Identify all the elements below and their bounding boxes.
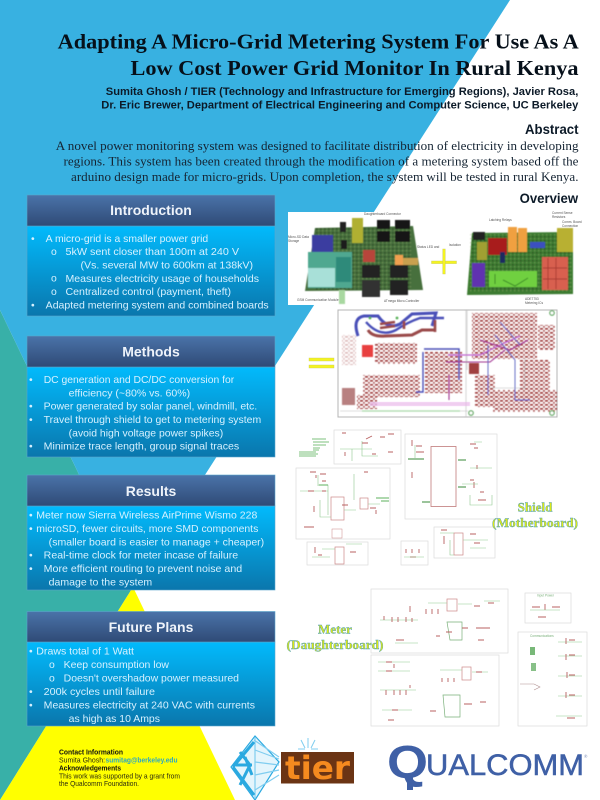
- abstract text: arduino design made for micro-grids. Upon completion, the system will be tested in rural Kenya.: [71, 170, 578, 184]
- contact information: Sumita Ghosh:: [59, 756, 105, 764]
- label: meter: Meter: [318, 622, 352, 636]
- shield callout labels: Daughterboard Connector: [364, 212, 402, 216]
- methods bullets: efficiency (~80% vs. 60%): [69, 388, 190, 400]
- methods bullets: •: [29, 415, 33, 426]
- shield schematics: [296, 430, 497, 565]
- methods bullets: •: [29, 375, 33, 386]
- pcb layout: [338, 310, 557, 417]
- results bullets: microSD, fewer circuits, more SMD components: [36, 524, 258, 535]
- methods body background: [27, 367, 275, 457]
- methods bullets: DC generation and DC/DC conversion for: [44, 375, 235, 386]
- results bullets: Meter now Sierra Wireless AirPrime Wismo 228: [36, 510, 258, 522]
- tier sunburst: [298, 738, 318, 749]
- shield callout labels: Status LED and: [417, 245, 440, 249]
- introduction bullets: [31, 234, 269, 312]
- authors: Sumita Ghosh / TIER (Technology and Infrastructure for Emerging Regions), Javier Rosa,: [106, 86, 578, 98]
- meter callout labels: Resistors: [552, 215, 566, 219]
- future plans header bar: [27, 612, 275, 642]
- meter callout labels: [449, 211, 582, 305]
- contact information: sumitag@berkeley.edu: [106, 756, 178, 764]
- future plans bullets: Keep consumption low: [64, 660, 169, 671]
- results bullets: Real-time clock for meter incase of failure: [44, 551, 238, 562]
- introduction bullets: Measures electricity usage of households: [66, 274, 259, 285]
- schematic sheet: input circuit: [296, 468, 390, 539]
- future plans bullets: o: [49, 660, 55, 671]
- schematic sheet: power: [334, 430, 401, 464]
- tier wordmark: tier: [285, 749, 350, 787]
- shield callout labels: GSM Communication Module: [297, 298, 339, 302]
- schematic sheet: interface: [307, 542, 368, 565]
- methods bullets: Travel through shield to get to metering system: [44, 415, 261, 426]
- label: shield: (Motherboard): [492, 515, 578, 530]
- schematic sheet: metering channel a: [371, 589, 508, 653]
- introduction heading: Introduction: [110, 202, 192, 218]
- label: shield: [492, 500, 578, 530]
- introduction bullets: o: [51, 274, 57, 284]
- methods bullets: (avoid high voltage power spikes): [69, 428, 223, 440]
- shield callout labels: Storage: [288, 239, 299, 243]
- logo: qualcomm: [387, 736, 588, 790]
- methods header bar: [27, 336, 275, 367]
- panel: methods: [27, 336, 275, 457]
- background: blue panel: [0, 0, 510, 587]
- future plans bullets: Doesn't overshadow power measured: [64, 674, 239, 684]
- contact information: Contact Information: [59, 748, 123, 756]
- introduction bullets: •: [31, 234, 35, 245]
- future plans bullets: •: [29, 687, 33, 698]
- background: yellow panel: [0, 587, 235, 800]
- results heading: Results: [126, 483, 176, 499]
- introduction body background: [27, 226, 275, 316]
- authors: [101, 86, 578, 112]
- future plans body background: [27, 642, 275, 726]
- methods heading: Methods: [122, 344, 180, 360]
- results bullets: •: [29, 524, 33, 535]
- schematic sheet: input power: [525, 593, 571, 623]
- methods bullets: Power generated by solar panel, windmill, etc.: [44, 402, 257, 413]
- meter callout labels: Isolation: [449, 243, 461, 247]
- title: Low Cost Power Grid Monitor In Rural Kenya: [130, 56, 579, 80]
- future plans bullets: •: [29, 646, 33, 658]
- results body background: [27, 506, 275, 590]
- results bullets: •: [29, 564, 33, 575]
- future plans bullets: o: [49, 674, 55, 684]
- meter callout labels: Comm. Board: [562, 220, 582, 224]
- panel: introduction: [27, 195, 275, 316]
- introduction bullets: o: [51, 287, 57, 298]
- meter schematics: [371, 589, 587, 726]
- introduction bullets: 5kW sent closer than 100m at 240 V: [66, 247, 239, 258]
- schematic sheet: regulator: [434, 527, 495, 558]
- tier diamond: [231, 736, 279, 800]
- future plans bullets: Draws total of 1 Watt: [36, 646, 134, 658]
- meter callout labels: Metering ICs: [525, 301, 543, 305]
- authors: Dr. Eric Brewer, Department of Electrical Engineering and Computer Science, UC Berkeley: [101, 100, 578, 112]
- abstract text: [56, 139, 579, 184]
- schematic sheet: input power: Input Power: [537, 594, 555, 598]
- introduction bullets: •: [31, 300, 35, 312]
- photo: meter daughterboard: [449, 211, 582, 305]
- title: [58, 30, 579, 80]
- results bullets: [29, 510, 264, 588]
- abstract heading: Abstract: [525, 122, 579, 137]
- photo: shield motherboard: [288, 212, 448, 305]
- contact information: Acknowledgements: [59, 764, 121, 772]
- meter callout labels: Connection: [562, 224, 578, 228]
- contact information: [59, 748, 180, 788]
- introduction header bar: [27, 195, 275, 226]
- shield callout labels: Micro-SD Data: [288, 235, 309, 239]
- abstract text: regions. This system has been created through the modification of a metering system based off the: [64, 154, 579, 168]
- schematic sheet: metering channel b: [371, 655, 499, 726]
- future plans heading: Future Plans: [109, 619, 194, 635]
- contact information: the Qualcomm Foundation.: [59, 779, 139, 788]
- icon: plus sign: [432, 249, 456, 274]
- meter callout labels: Current Sense: [552, 211, 573, 215]
- panel: results: [27, 475, 275, 590]
- label: meter: [286, 622, 384, 652]
- background: teal panel: [0, 310, 133, 800]
- schematic sheet: communications: [518, 632, 587, 726]
- icon: equals sign: [309, 358, 334, 368]
- results bullets: •: [29, 551, 33, 562]
- results header bar: [27, 475, 275, 506]
- logo: qualcomm: Q: [387, 736, 428, 788]
- future plans bullets: as high as 10 Amps: [69, 714, 160, 725]
- results bullets: More efficient routing to prevent noise and: [44, 564, 242, 575]
- panel: future plans: [27, 612, 275, 726]
- meter callout labels: ADE7753: [525, 297, 539, 301]
- contact information: This work was supported by a grant from: [59, 772, 180, 780]
- methods bullets: Minimize trace length, group signal traces: [44, 442, 239, 453]
- schematic legend lines: [299, 439, 329, 456]
- results bullets: damage to the system: [49, 578, 152, 588]
- overview heading: Overview: [520, 191, 579, 206]
- future plans bullets: [29, 646, 255, 725]
- introduction bullets: A micro-grid is a smaller power grid: [46, 234, 208, 245]
- meter callout labels: Latching Relays: [489, 218, 512, 222]
- schematic sheet: microcontroller: [405, 434, 497, 519]
- label: shield: Shield: [518, 500, 553, 514]
- methods bullets: •: [29, 402, 33, 413]
- logo: tier: [231, 736, 354, 800]
- introduction bullets: Adapted metering system and combined boards: [46, 300, 269, 312]
- methods bullets: •: [29, 442, 33, 453]
- results bullets: (smaller board is easier to manage + cheaper): [49, 538, 264, 548]
- schematic sheet: communications: Communications: [530, 634, 554, 638]
- future plans bullets: 200k cycles until failure: [44, 687, 155, 698]
- results bullets: •: [29, 510, 33, 522]
- methods bullets: [29, 375, 261, 453]
- title: Adapting A Micro-Grid Metering System For Use As A: [58, 30, 579, 54]
- logo: qualcomm: UALCOMM: [426, 749, 584, 782]
- label: meter: (Daughterboard): [286, 637, 384, 652]
- abstract text: A novel power monitoring system was designed to facilitate distribution of electricity in developing: [56, 139, 579, 153]
- future plans bullets: •: [29, 700, 33, 712]
- shield callout labels: ATmega Micro-Controller: [384, 299, 420, 303]
- future plans bullets: Measures electricity at 240 VAC with currents: [44, 700, 255, 712]
- introduction bullets: (Vs. several MW to 600km at 138kV): [80, 260, 253, 272]
- introduction bullets: Centralized control (payment, theft): [66, 287, 231, 298]
- schematic sheet: connector: [401, 541, 428, 565]
- shield callout labels: [288, 212, 440, 303]
- logo: qualcomm: ®: [584, 753, 588, 759]
- introduction bullets: o: [51, 247, 57, 258]
